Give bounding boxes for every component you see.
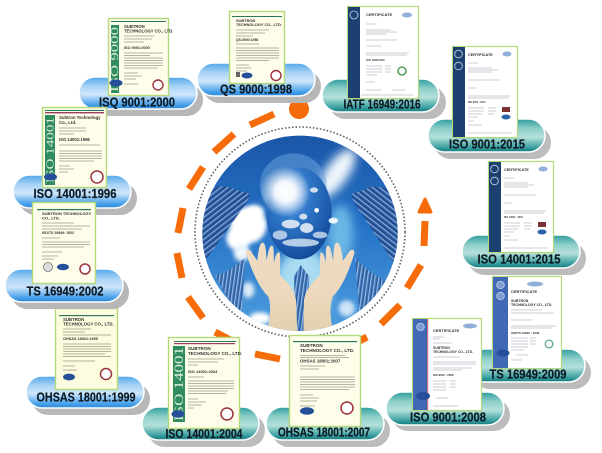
right hand bbox=[303, 243, 354, 333]
certificate: CERTIFICATE bbox=[504, 168, 529, 172]
certificate: SUBTRON bbox=[63, 317, 84, 322]
certificate bbox=[348, 6, 418, 98]
central image: globe held by hands among skyscrapers bbox=[200, 133, 400, 337]
badge: ISQ 9001:2000 bbox=[79, 18, 203, 116]
certificate: ISO 14001 bbox=[44, 117, 56, 183]
dashed orange ring with arrow bbox=[177, 99, 431, 359]
globe clouds bbox=[273, 187, 338, 247]
label: ISO 14001:2004 bbox=[166, 427, 243, 441]
certificate: TECHNOLOGY CO., LTD. bbox=[124, 28, 173, 34]
certificate bbox=[168, 338, 242, 428]
globe bbox=[266, 167, 332, 259]
certificate: TECHNOLOGY CO., LTD. bbox=[511, 303, 552, 307]
certificate: TECHNOLOGY CO., LTD. bbox=[236, 22, 282, 27]
certificate: IATF 16949:2016 bbox=[366, 59, 385, 62]
certificate: OHSAS 18001:2007 bbox=[300, 358, 341, 364]
sphere of data above globe bbox=[260, 153, 327, 204]
badge: QS 9000:1998 bbox=[197, 12, 321, 103]
certificate: TECHNOLOGY CO., LTD. bbox=[63, 322, 114, 326]
badge: TS 16949:2002 bbox=[5, 202, 129, 309]
badge: ISO 14001:1996 bbox=[13, 108, 137, 215]
certificate: SUBTRON bbox=[188, 346, 211, 351]
certificate bbox=[32, 202, 96, 284]
certificate: SUBTRON bbox=[511, 299, 529, 303]
certificate bbox=[492, 276, 562, 368]
badge: TS 16949:2009 bbox=[467, 276, 591, 389]
certificate: ISO/TS 16949 : 2009 bbox=[511, 331, 540, 335]
certificate: ISO 14001 : 2015 bbox=[504, 216, 524, 219]
certificate: SUBTRON bbox=[124, 24, 145, 29]
certificate: ISO 9001 : 2015 bbox=[468, 101, 486, 104]
certificate bbox=[412, 318, 482, 410]
certificate bbox=[42, 108, 106, 188]
certificate: CERTIFICATE bbox=[366, 12, 392, 17]
certificate bbox=[452, 46, 518, 138]
certificate: CERTIFICATE bbox=[468, 53, 493, 57]
certificate bbox=[290, 336, 360, 426]
certificate bbox=[108, 18, 173, 96]
certificate: ISO 9001 : 2008 bbox=[433, 373, 454, 377]
label: OHSAS 18001:1999 bbox=[36, 390, 136, 404]
certificate: TECHNOLOGY CO., LTD. bbox=[300, 348, 354, 353]
certificate: TECHNOLOGY CO., LTD. bbox=[188, 351, 242, 356]
badge: OHSAS 18001:2007 bbox=[266, 336, 390, 447]
label: QS 9000:1998 bbox=[220, 82, 292, 96]
certificate: SUBTRON bbox=[433, 346, 450, 350]
certificate: SUBTRON bbox=[300, 343, 323, 348]
clouds bbox=[226, 144, 362, 325]
badge: ISO 9001:2008 bbox=[386, 318, 510, 431]
certificate bbox=[56, 308, 118, 390]
sky bbox=[200, 133, 400, 333]
badge: OHSAS 18001:1999 bbox=[26, 308, 150, 415]
label: ISO 9001:2008 bbox=[410, 410, 486, 424]
left hand bbox=[246, 243, 297, 333]
label: ISQ 9001:2000 bbox=[99, 96, 175, 110]
skyscrapers bbox=[200, 186, 400, 337]
certificate: Subtron Technology bbox=[59, 115, 101, 120]
certificate: SUBTRON TECHNOLOGY bbox=[42, 211, 91, 216]
dotted ring bbox=[195, 127, 405, 337]
badge: ISO 14001:2015 bbox=[462, 162, 586, 275]
certificate: CO., LTD. bbox=[42, 216, 60, 220]
certificate: ISO/TS 16949: 2002 bbox=[42, 231, 74, 235]
label: TS 16949:2002 bbox=[26, 284, 104, 298]
certificate: OHSAS 18001:1999 bbox=[63, 337, 98, 341]
certificate: ISO 14001:1996 bbox=[59, 137, 90, 142]
certificate: ISO 9001:2000 bbox=[124, 46, 150, 50]
certificate: SUBTRON bbox=[236, 18, 255, 23]
certificate bbox=[488, 162, 554, 252]
certificate: ISO 14001:2004 bbox=[188, 369, 218, 374]
label: OHSAS 18001:2007 bbox=[278, 426, 370, 440]
label: ISO 14001:1996 bbox=[34, 187, 117, 201]
certificate: Co., Ltd. bbox=[59, 120, 76, 125]
certificate: ISO 14001 bbox=[171, 347, 186, 421]
certificate: TECHNOLOGY CO., LTD. bbox=[433, 350, 473, 354]
label: ISO 14001:2015 bbox=[478, 252, 561, 266]
badge: ISO 14001:2004 bbox=[142, 338, 265, 447]
certificate bbox=[230, 12, 284, 84]
badge: ISO 9001:2015 bbox=[428, 46, 551, 159]
certificate: ISO 9000 bbox=[110, 27, 121, 92]
certificate: CERTIFICATE bbox=[511, 289, 537, 294]
certificate: QS-9000:1998 bbox=[236, 38, 258, 42]
certificate: CERTIFICATE bbox=[433, 328, 459, 333]
label: TS 16949:2009 bbox=[490, 368, 567, 382]
sun glare bbox=[260, 167, 310, 217]
badge: IATF 16949:2016 bbox=[322, 6, 446, 119]
label: IATF 16949:2016 bbox=[344, 98, 421, 112]
label: ISO 9001:2015 bbox=[449, 138, 525, 152]
